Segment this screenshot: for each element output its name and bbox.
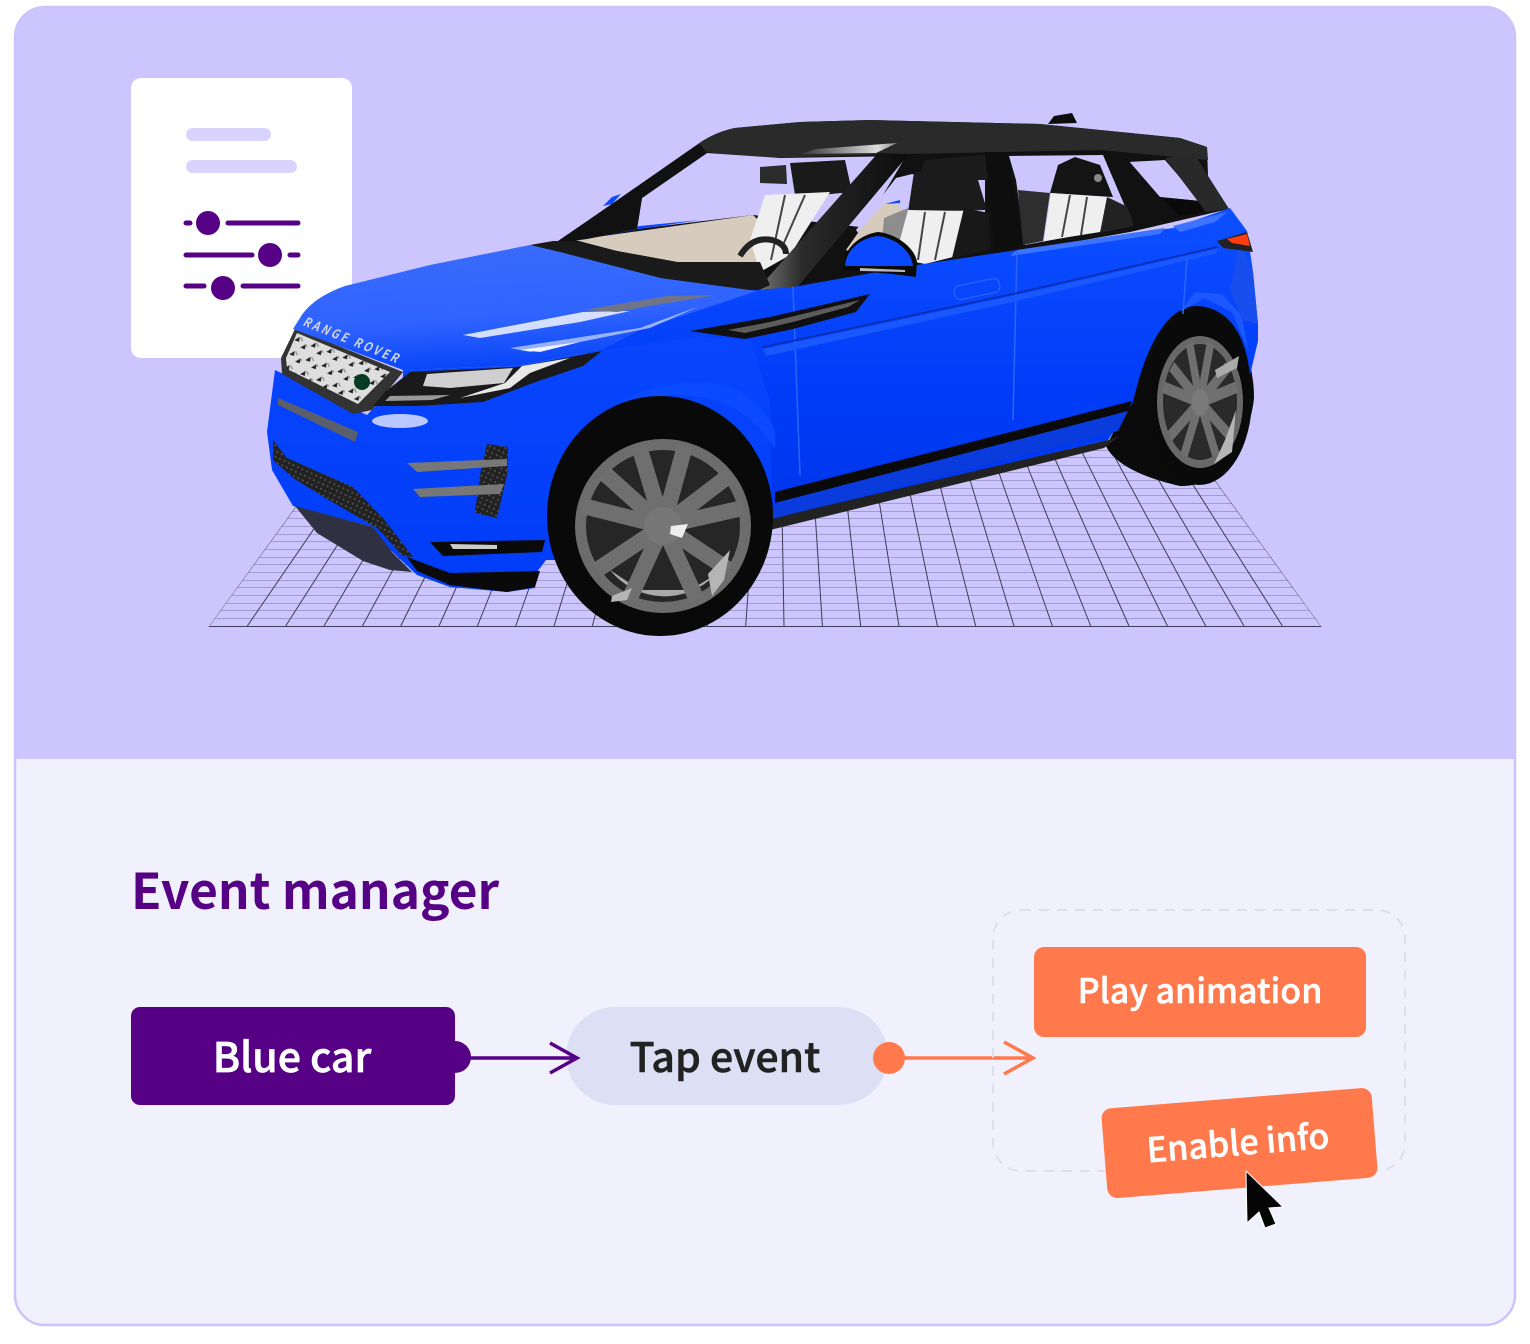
hood lettering: RANGE ROVER xyxy=(301,311,404,368)
rear seat xyxy=(1018,157,1133,245)
windshield cowl xyxy=(530,241,770,291)
text placeholder bars xyxy=(186,128,297,173)
panel: lavender car stage xyxy=(15,7,1515,759)
left A pillar xyxy=(555,144,707,243)
roof glint xyxy=(800,143,897,154)
arrow: Tap event to actions xyxy=(873,1042,1033,1074)
body crease xyxy=(763,247,1217,347)
heading: Event manager xyxy=(131,852,500,924)
front lower trim xyxy=(407,540,545,592)
node: Tap event: Tap event xyxy=(630,1024,820,1084)
far door mirror xyxy=(603,194,621,206)
icon: mouse cursor xyxy=(1246,1171,1283,1228)
C pillar xyxy=(1103,151,1207,226)
action: Enable info: Enable info xyxy=(1145,1109,1331,1172)
side air vent xyxy=(407,444,508,518)
icon: sliders xyxy=(186,211,298,300)
node: Blue car: Blue car xyxy=(213,1024,371,1084)
node: Blue car xyxy=(131,1007,471,1105)
hood vent xyxy=(583,295,717,312)
grille xyxy=(281,329,403,414)
node: Tap event xyxy=(566,1007,888,1105)
rear side window xyxy=(1009,155,1133,245)
front bumper xyxy=(267,370,640,592)
black side stripe xyxy=(775,401,1132,503)
hood xyxy=(293,245,757,370)
belt highlight xyxy=(1010,212,1227,256)
fender arch highlight xyxy=(622,383,775,450)
bumper highlight xyxy=(372,414,428,428)
action: Enable info xyxy=(1101,1087,1378,1199)
car underside sill xyxy=(770,436,1120,530)
B pillar xyxy=(985,152,1023,252)
driver seat xyxy=(740,160,852,272)
door mirror xyxy=(843,232,917,277)
settings document card xyxy=(131,78,352,358)
interior beige dashboard xyxy=(575,215,780,262)
headlamp xyxy=(373,351,602,406)
car body side xyxy=(570,208,1258,518)
rear flare light xyxy=(1180,292,1248,350)
door handle xyxy=(953,277,1001,301)
antenna xyxy=(1048,113,1077,124)
brake disc glint xyxy=(610,570,715,596)
tail light xyxy=(1217,232,1253,252)
action: Play animation xyxy=(1034,947,1366,1037)
front side window xyxy=(856,156,985,262)
cabin roof and pillars xyxy=(560,113,1229,292)
passenger seat xyxy=(880,155,990,264)
action: Play animation: Play animation xyxy=(1078,964,1322,1013)
arrow: Blue car to Tap event xyxy=(468,1043,577,1073)
hood shine streaks xyxy=(463,306,700,352)
dashed action group xyxy=(993,910,1405,1171)
right A pillar xyxy=(757,153,909,290)
perspective floor grid xyxy=(200,450,1330,626)
rear quarter window xyxy=(1128,160,1200,201)
grille badge xyxy=(354,374,370,390)
rearview mirror xyxy=(760,165,787,184)
fender vent xyxy=(690,294,870,339)
illustration: blue car xyxy=(267,113,1258,636)
lower grille xyxy=(273,440,413,557)
upper bumper slit xyxy=(278,398,358,442)
steering wheel xyxy=(740,239,786,256)
windshield opening xyxy=(637,153,906,229)
door shut lines xyxy=(793,250,1187,475)
chin splitter xyxy=(295,506,412,572)
lower sill blue xyxy=(772,411,1128,519)
rear wheel xyxy=(1106,302,1254,486)
front wheel xyxy=(547,396,773,636)
front fender xyxy=(400,336,772,560)
